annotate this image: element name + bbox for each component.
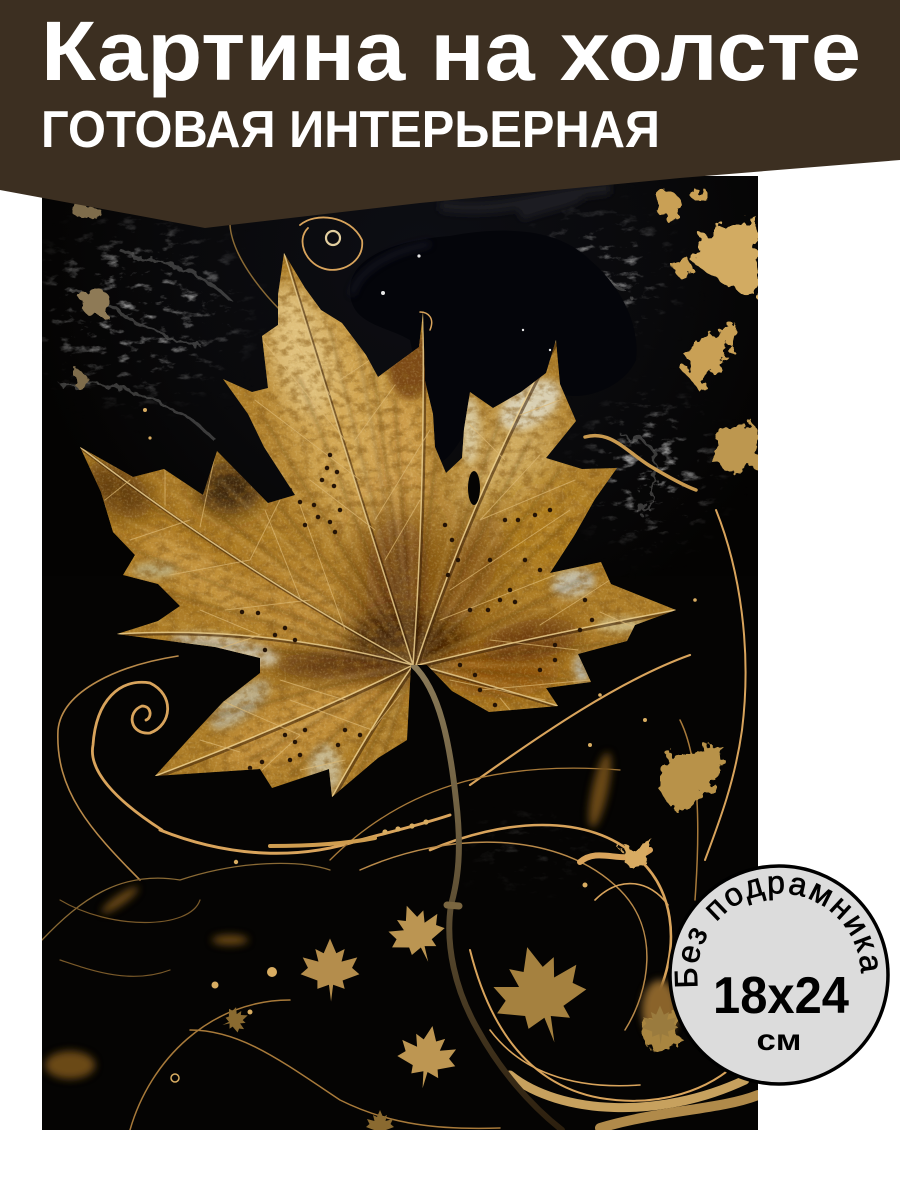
small maple leaves	[218, 896, 678, 1140]
badge size text: 18x24	[713, 967, 849, 1025]
leaf dark hole	[468, 471, 480, 505]
textured dark background upper	[42, 182, 727, 881]
leaf paint texture	[84, 259, 663, 794]
spiral ornaments and gold lines	[42, 217, 758, 1130]
gold dots	[143, 408, 697, 1082]
black glossy paint blob	[351, 185, 636, 374]
subtitle: ГОТОВАЯ ИНТЕРЬЕРНАЯ	[41, 101, 660, 159]
leaf colour modelling	[74, 275, 648, 796]
leaf stem	[413, 665, 562, 1130]
leaf streaks radiating from the base	[124, 328, 627, 777]
size badge	[668, 864, 890, 1086]
main maple leaf	[70, 240, 690, 810]
dark scattered gold smudges	[45, 751, 678, 1079]
header ribbon	[0, 0, 900, 228]
badge arc text: Без подрамника	[674, 876, 878, 986]
leaf dark speckles	[242, 455, 592, 768]
painting on canvas	[42, 176, 760, 1140]
gold paint patches right	[72, 187, 760, 472]
badge unit text: см	[756, 1024, 802, 1057]
leaf veins	[80, 253, 678, 798]
white paint dots	[381, 254, 551, 351]
gold splash upper right of badge	[620, 745, 725, 1050]
title: Картина на холсте	[41, 4, 861, 98]
